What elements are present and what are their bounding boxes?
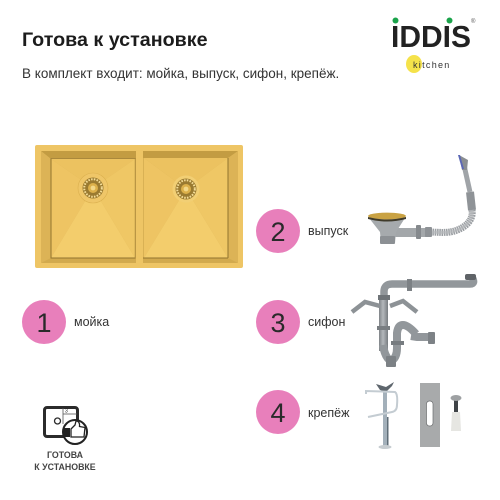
siphon product xyxy=(352,274,476,367)
drain outlet product xyxy=(368,155,472,244)
green dots xyxy=(392,18,398,24)
registered mark: ® xyxy=(471,18,476,25)
title: Готова к установке xyxy=(22,29,208,51)
upper tube xyxy=(470,192,472,210)
sink xyxy=(35,145,243,268)
yellow blob xyxy=(406,55,422,73)
kitchen text: kitchen xyxy=(413,60,451,70)
icon: ready to install xyxy=(44,408,87,444)
label: сифон: сифон xyxy=(308,315,345,329)
badge 2: 2 xyxy=(270,217,286,247)
fastener: screw with plug xyxy=(450,395,462,431)
vertical pipe xyxy=(379,296,388,351)
badge 1: 1 xyxy=(36,308,52,338)
waste pipe xyxy=(384,277,474,298)
icon caption: К УСТАНОВКЕ xyxy=(34,462,96,472)
fastener: slotted plate xyxy=(420,383,440,447)
strainer body xyxy=(369,218,405,243)
trap xyxy=(383,325,416,361)
label: мойка: мойка xyxy=(74,315,109,329)
icon: ready to install: 3 xyxy=(65,408,68,414)
wordmark: IDDIS xyxy=(391,19,471,54)
left arm xyxy=(352,302,380,312)
logo: IDDIS kitchen xyxy=(391,18,476,73)
badge 3: 3 xyxy=(270,308,286,338)
subtitle: kit contents: В комплект входит: мойка, выпуск, сифон, крепёж. xyxy=(22,66,339,81)
label: выпуск: выпуск xyxy=(308,224,349,238)
badge 2 xyxy=(256,209,300,253)
badge 3 xyxy=(256,300,300,344)
label: крепёж: крепёж xyxy=(308,406,350,420)
outlet xyxy=(411,336,432,337)
badge 4: 4 xyxy=(270,398,286,428)
connector pipe xyxy=(394,228,430,237)
right basin xyxy=(143,151,238,263)
fastener: clamp bolt xyxy=(366,382,397,449)
left basin xyxy=(41,151,136,263)
badge 4 xyxy=(256,390,300,434)
icon caption xyxy=(34,450,96,472)
right arm xyxy=(390,301,417,312)
right drain xyxy=(172,176,200,202)
badge 1 xyxy=(22,300,66,344)
thumbs-up badge xyxy=(63,420,87,444)
icon caption: ГОТОВА xyxy=(47,450,84,460)
hose xyxy=(428,210,472,232)
left drain xyxy=(78,173,108,203)
